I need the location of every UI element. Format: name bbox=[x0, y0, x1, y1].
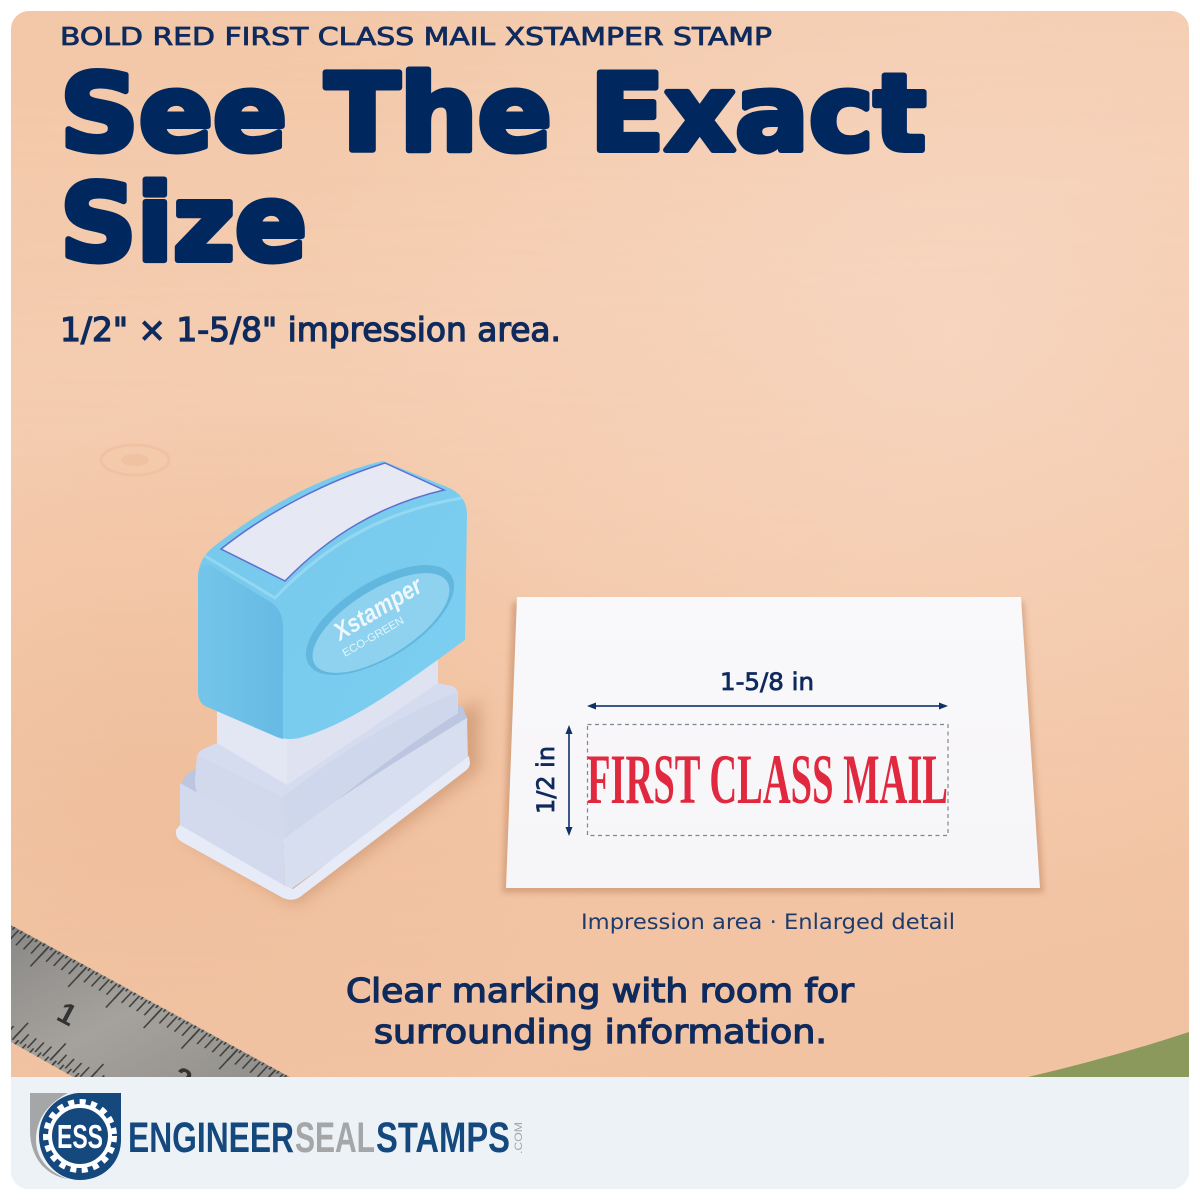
width label: 1-5/8 in bbox=[720, 668, 814, 696]
white paper card bbox=[506, 597, 1040, 888]
bottom statement: Clear marking with room for bbox=[346, 971, 854, 1010]
eyebrow heading: BOLD RED FIRST CLASS MAIL XSTAMPER STAMP bbox=[60, 22, 772, 51]
stamp shadow bbox=[180, 700, 480, 905]
xstamper stamp illustration bbox=[176, 461, 471, 900]
oval logo badge: Xstamper bbox=[327, 571, 428, 647]
bottom footer band bbox=[11, 1077, 1189, 1189]
oval logo badge bbox=[289, 543, 471, 697]
width arrow bbox=[587, 702, 948, 710]
main title: See The Exact bbox=[60, 52, 926, 175]
logo: engineer seal stamps bbox=[30, 1093, 525, 1180]
height arrow bbox=[566, 725, 572, 836]
main title: Size bbox=[60, 162, 307, 285]
stamp base front bbox=[176, 718, 470, 900]
blue cap bbox=[198, 461, 471, 739]
height label: 1/2 in bbox=[532, 746, 560, 814]
logo wordmark: STAMPS bbox=[376, 1114, 510, 1162]
logo wordmark: SEAL bbox=[295, 1114, 375, 1162]
logo wordmark: ENGINEER bbox=[128, 1114, 294, 1162]
stamp middle platform bbox=[195, 683, 458, 843]
logo shield: ESS bbox=[57, 1118, 103, 1155]
bottom statement: surrounding information. bbox=[374, 1012, 827, 1051]
caption: impression area enlarged detail: Impression area · Enlarged detail bbox=[581, 910, 955, 934]
stamp neck bbox=[217, 640, 438, 785]
paper card shadow bbox=[502, 602, 1044, 893]
label window bbox=[221, 463, 444, 581]
logo shield bbox=[30, 1093, 121, 1180]
logo dot com: .COM bbox=[513, 1122, 525, 1154]
bottom statement bbox=[346, 971, 854, 1051]
subheading: impression area: 1/2" × 1-5/8" impression area. bbox=[60, 310, 561, 349]
logo wordmark bbox=[128, 1114, 510, 1162]
stamp base back rim bbox=[180, 700, 468, 840]
dashed impression area bbox=[588, 724, 948, 836]
main title bbox=[60, 52, 926, 285]
ruler: 1 bbox=[52, 996, 82, 1033]
ruler: 2 bbox=[167, 1061, 197, 1098]
ruler bbox=[11, 925, 290, 1077]
oval logo badge: ECO-GREEN bbox=[340, 615, 406, 660]
